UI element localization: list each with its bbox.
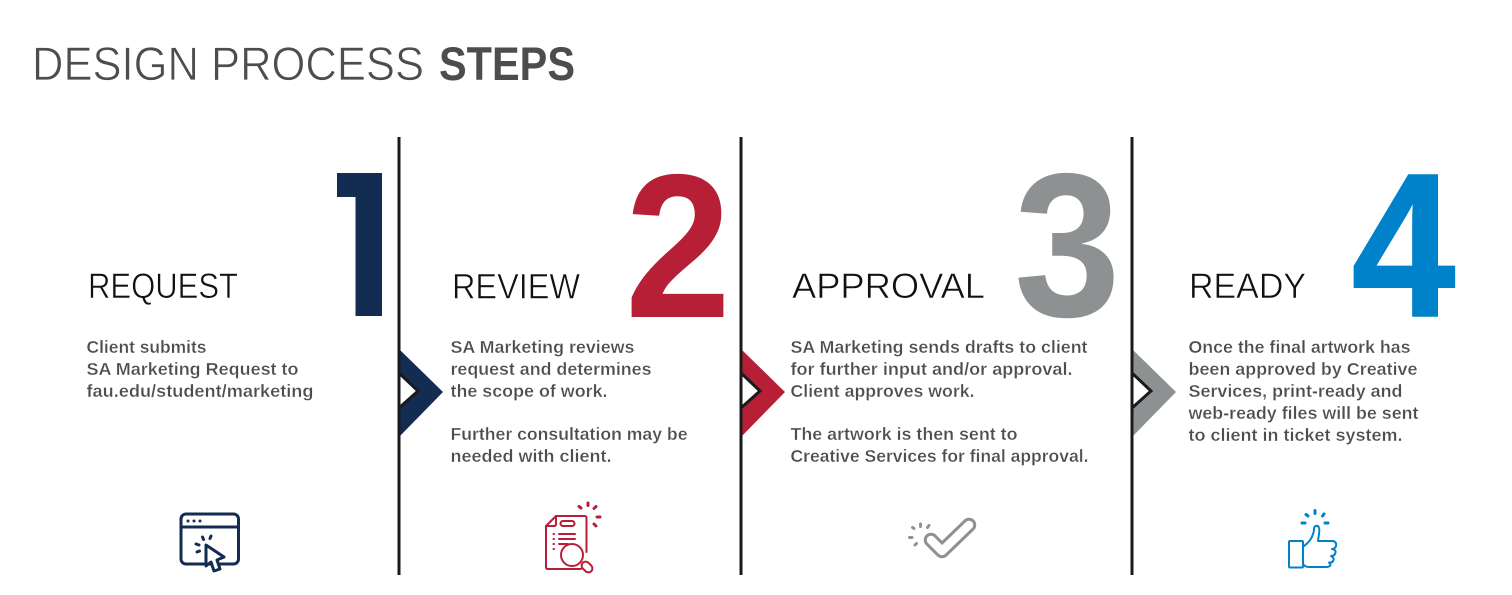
text: approval description [790, 337, 1088, 466]
title: DESIGN PROCESS [32, 37, 424, 90]
text: request description [86, 337, 314, 401]
text: request description: SA Marketing Request to [86, 359, 298, 379]
heading: request: REQUEST [88, 267, 238, 306]
icon: check mark [910, 524, 969, 551]
text: approval description: Client approves work. [790, 381, 974, 401]
text: ready description: Once the final artwork has [1188, 337, 1411, 357]
heading: ready: READY [1189, 267, 1306, 306]
text: request description: fau.edu/student/marketing [86, 381, 314, 401]
number 3: 3 [1014, 131, 1120, 360]
text: ready description: to client in ticket system. [1188, 425, 1402, 445]
text: review description: request and determines [450, 359, 652, 379]
number 2: 2 [625, 132, 731, 361]
text: ready description: web-ready files will be sent [1187, 403, 1419, 423]
text: request description: Client submits [86, 337, 207, 357]
text: approval description: The artwork is then sent to [790, 424, 1018, 444]
text: review description: SA Marketing reviews [450, 337, 635, 357]
text: approval description: Creative Services for final approval. [790, 446, 1088, 466]
icon: thumbs up [1289, 510, 1336, 568]
text: review description: needed with client. [450, 446, 612, 466]
panel: step 1 request [86, 131, 420, 571]
icon: browser window with cursor [181, 514, 238, 571]
text: approval description: for further input and/or approval. [790, 359, 1072, 379]
icon: document with magnifier [546, 503, 600, 574]
heading: approval: APPROVAL [792, 267, 985, 306]
number 1 [337, 173, 382, 316]
divider and arrow 3 [1132, 137, 1176, 575]
divider and arrow 1 [399, 137, 443, 575]
number 4: 4 [1352, 131, 1456, 360]
number 1: 1 [306, 131, 420, 360]
heading: review: REVIEW [452, 268, 580, 306]
panel: step 3 approval [790, 131, 1120, 551]
text: approval description: SA Marketing sends drafts to client [790, 337, 1088, 357]
divider and arrow 2 [741, 137, 785, 575]
text: ready description [1187, 337, 1419, 445]
text: ready description: been approved by Creative [1188, 359, 1418, 379]
text: ready description: Services, print-ready and [1188, 381, 1402, 401]
text: review description: the scope of work. [450, 381, 608, 401]
panel: step 4 ready [1187, 131, 1456, 568]
panel: step 2 review [450, 132, 731, 574]
title: STEPS [439, 37, 575, 90]
text: review description [450, 337, 688, 466]
text: review description: Further consultation may be [450, 424, 688, 444]
